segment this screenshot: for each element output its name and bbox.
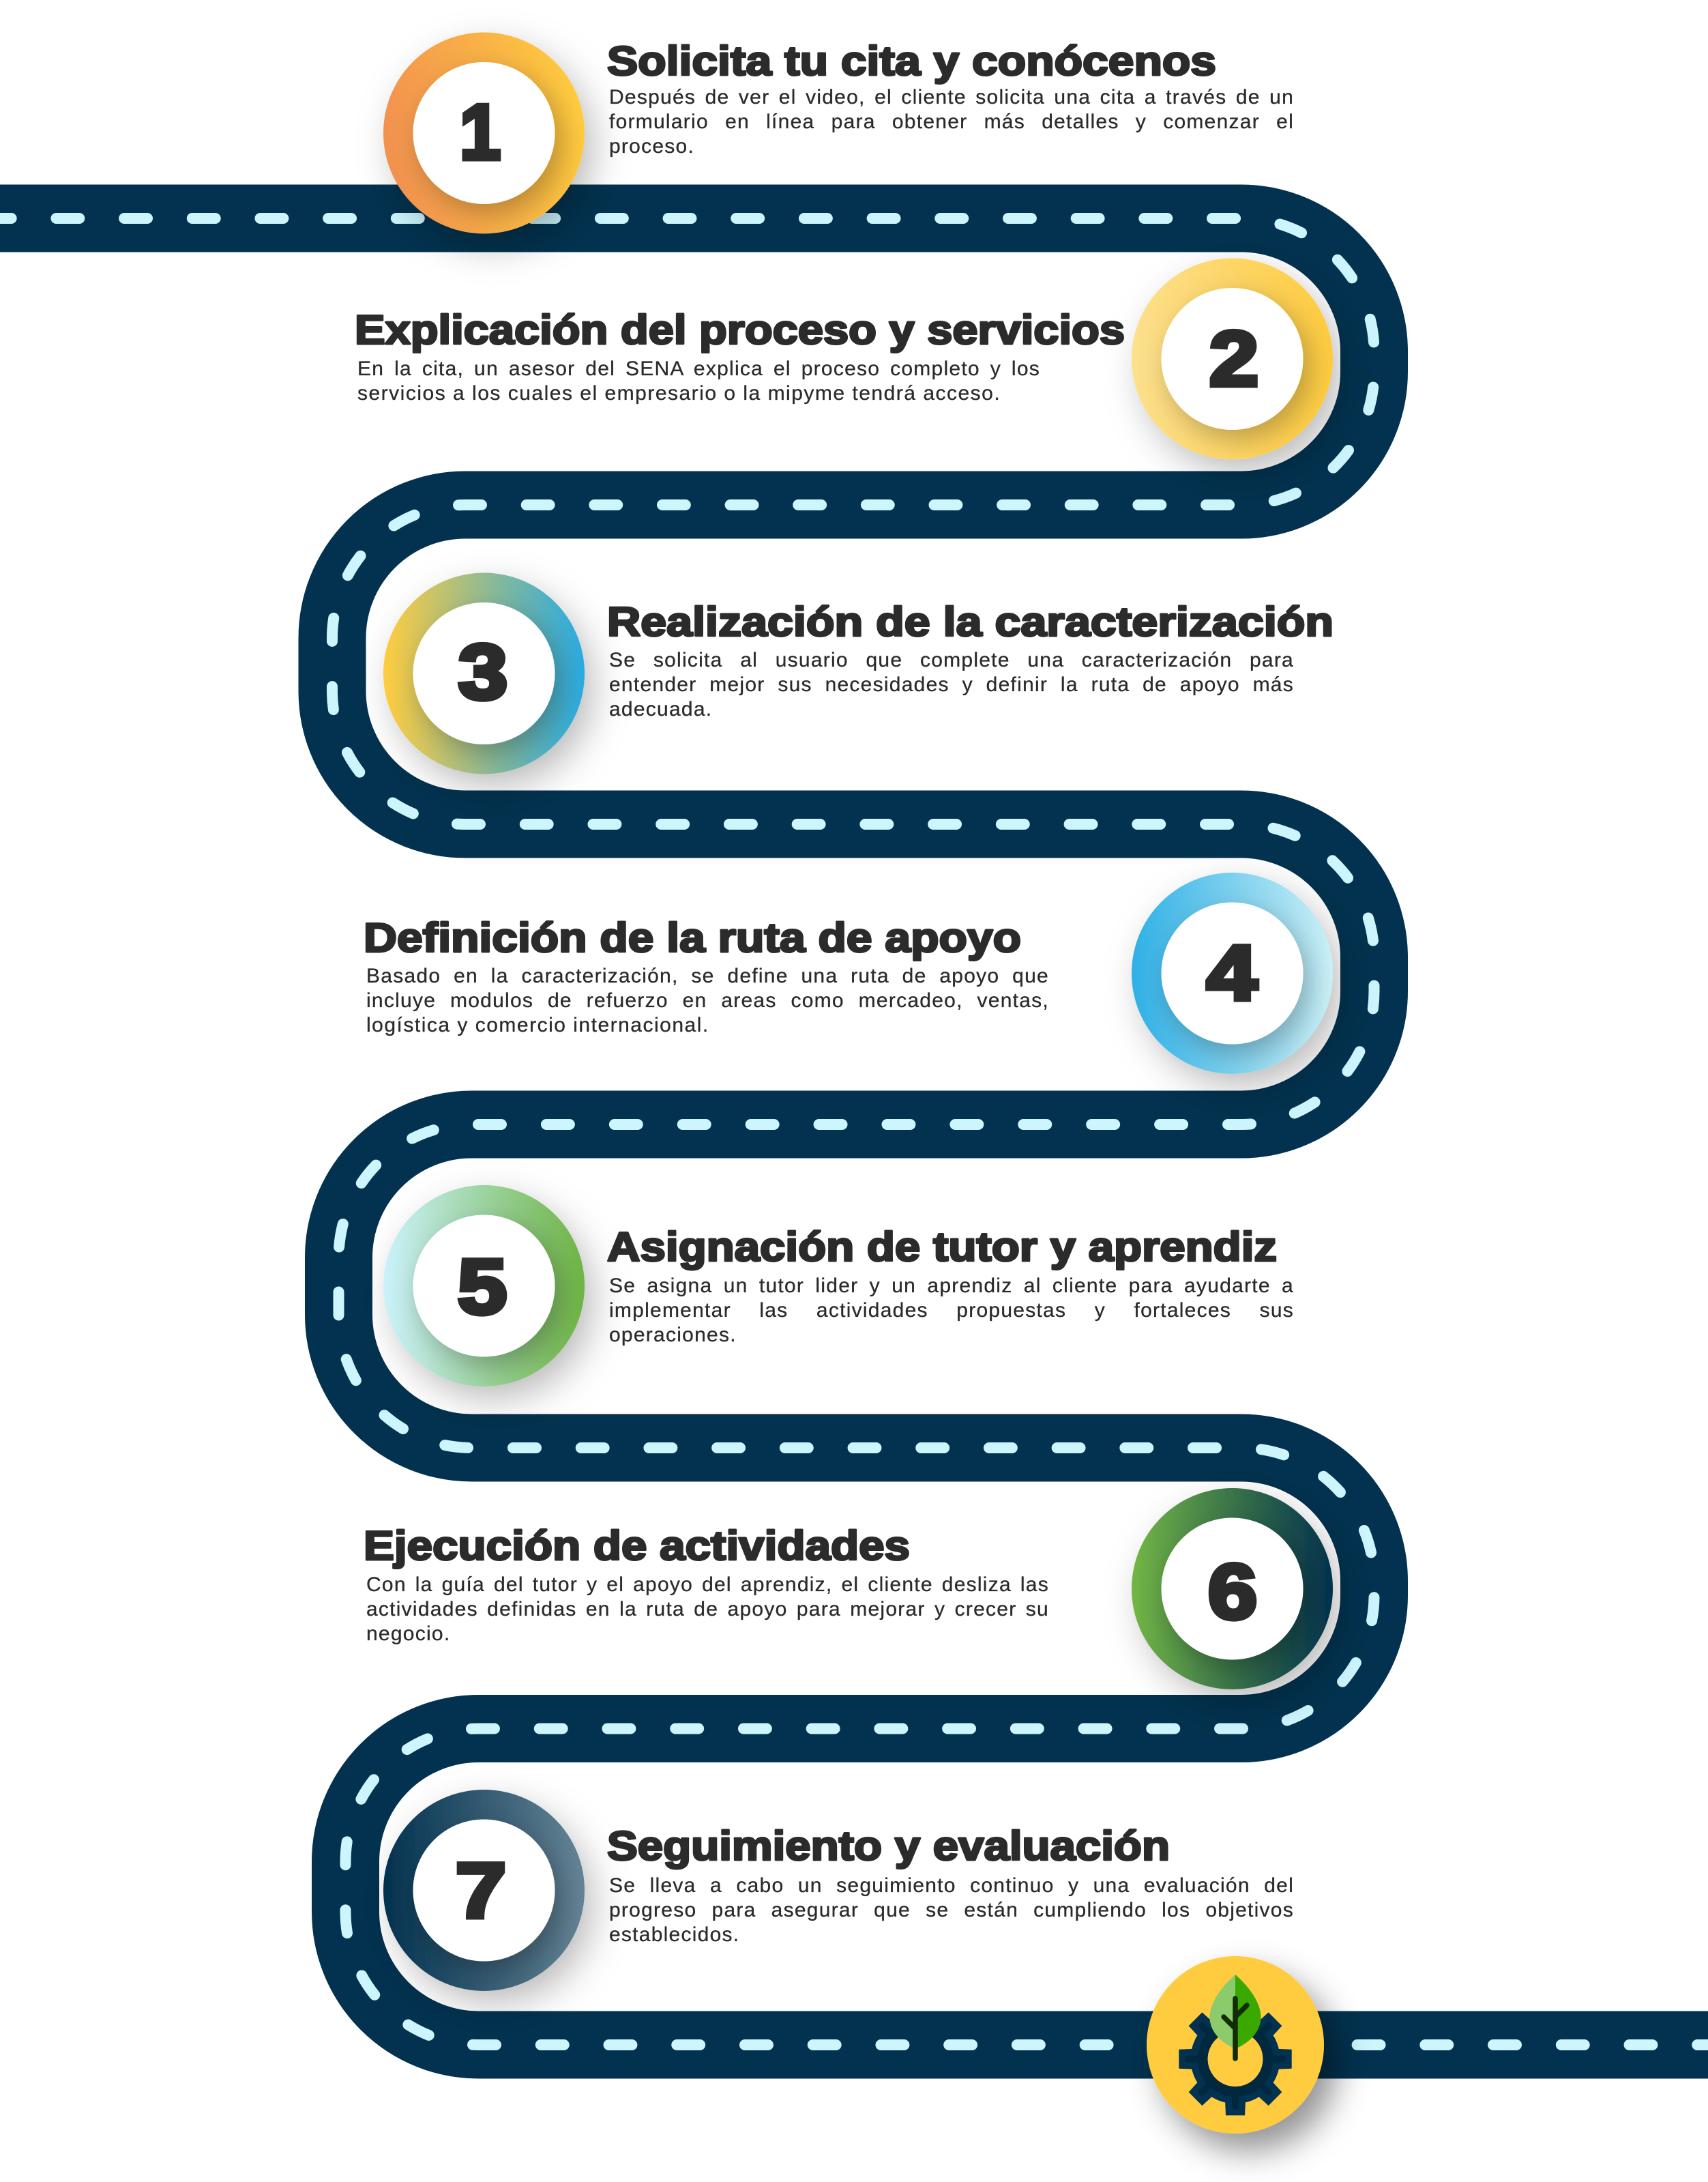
badge 3: 3 bbox=[458, 629, 507, 716]
text block 3: adecuada. bbox=[609, 698, 712, 721]
text block 6: negocio. bbox=[366, 1623, 450, 1645]
text block 5: operaciones. bbox=[609, 1324, 737, 1346]
badge 4 bbox=[1132, 873, 1333, 1074]
badge 7 bbox=[383, 1790, 585, 1991]
heading 6: Ejecución de actividades bbox=[364, 1523, 910, 1569]
heading 5: Asignación de tutor y aprendiz bbox=[607, 1224, 1277, 1270]
text block 6: actividades definidas en la ruta de apoyo para mejorar y crecer su bbox=[366, 1598, 1049, 1620]
text block 6: Con la guía del tutor y el apoyo del aprendiz, el cliente desliza las bbox=[366, 1573, 1049, 1596]
panel: step 5 bbox=[375, 1180, 1294, 1414]
text block 7 bbox=[609, 1874, 1294, 1946]
heading 3: Realización de la caracterización bbox=[607, 599, 1334, 645]
text block 3 bbox=[609, 649, 1294, 721]
panel: step 4 bbox=[364, 868, 1344, 1090]
heading 1: Solicita tu cita y conócenos bbox=[607, 38, 1216, 84]
text block 1: Después de ver el video, el cliente solicita una cita a través de un bbox=[609, 86, 1294, 108]
text block 4: incluye modulos de refuerzo en areas como mercadeo, ventas, bbox=[366, 989, 1049, 1012]
heading 4: Definición de la ruta de apoyo bbox=[364, 915, 1021, 961]
text block 6 bbox=[366, 1573, 1049, 1645]
badge 2 bbox=[1132, 258, 1333, 460]
text block 1: proceso. bbox=[609, 135, 694, 158]
text block 1: formulario en línea para obtener más detalles y comenzar el bbox=[609, 111, 1294, 133]
text block 5 bbox=[609, 1275, 1294, 1346]
panel: step 1 bbox=[375, 28, 1294, 265]
text block 7: progreso para asegurar que se están cumpliendo los objetivos bbox=[609, 1899, 1294, 1921]
heading 7: Seguimiento y evaluación bbox=[607, 1823, 1170, 1869]
heading 2: Explicación del proceso y servicios bbox=[355, 307, 1125, 353]
text block 7: establecidos. bbox=[609, 1923, 739, 1946]
badge 5 bbox=[383, 1185, 585, 1386]
badge 1: 1 bbox=[460, 89, 501, 176]
badge 6: 6 bbox=[1208, 1549, 1257, 1635]
badge 4: 4 bbox=[1207, 930, 1257, 1017]
text block 3: Se solicita al usuario que complete una caracterización para bbox=[609, 649, 1294, 671]
badge 5: 5 bbox=[458, 1244, 507, 1330]
text block 2: servicios a los cuales el empresario o la mipyme tendrá acceso. bbox=[357, 382, 1001, 405]
badge 3 bbox=[383, 573, 585, 774]
text block 4: Basado en la caracterización, se define una ruta de apoyo que bbox=[366, 965, 1049, 987]
badge 7: 7 bbox=[456, 1848, 506, 1934]
text block 7: Se lleva a cabo un seguimiento continuo y una evaluación del bbox=[609, 1874, 1294, 1897]
text block 5: Se asigna un tutor lider y un aprendiz al cliente para ayudarte a bbox=[609, 1275, 1294, 1297]
text block 3: entender mejor sus necesidades y definir la ruta de apoyo más bbox=[609, 673, 1294, 696]
icon: gear and leaf end badge bbox=[1140, 1953, 1357, 2172]
text block 1 bbox=[609, 86, 1294, 158]
panel: step 7 bbox=[379, 1785, 1294, 2011]
badge 6 bbox=[1132, 1488, 1333, 1689]
text block 4: logística y comercio internacional. bbox=[366, 1014, 709, 1036]
panel: step 3 bbox=[375, 568, 1334, 790]
badge 2: 2 bbox=[1209, 316, 1258, 403]
panel: step 2 bbox=[355, 254, 1344, 475]
text block 5: implementar las actividades propuestas y fortaleces sus bbox=[609, 1299, 1294, 1322]
text block 4 bbox=[366, 965, 1049, 1036]
panel: step 6 bbox=[364, 1483, 1344, 1704]
badge 1 bbox=[383, 33, 585, 233]
text block 2 bbox=[357, 358, 1040, 405]
text block 2: En la cita, un asesor del SENA explica el proceso completo y los bbox=[357, 358, 1040, 380]
